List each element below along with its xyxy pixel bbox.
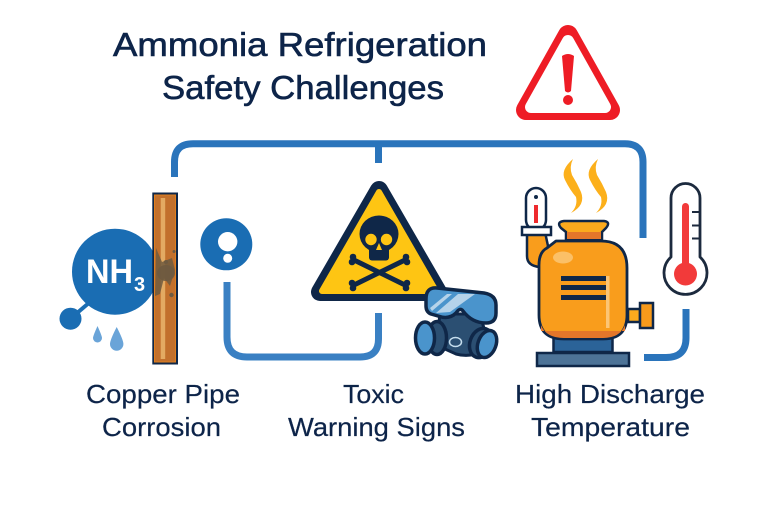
icon: toxic warning triangle <box>320 190 438 292</box>
skull and crossbones <box>349 216 410 291</box>
flames <box>564 159 607 213</box>
gauge <box>526 188 546 230</box>
label: toxic warning signs: Toxic <box>343 379 404 409</box>
label: copper pipe corrosion: Copper Pipe <box>86 379 240 409</box>
icon: red warning triangle <box>526 35 610 110</box>
connector: lower right bracket <box>644 309 686 358</box>
formula text: 3 <box>134 274 145 296</box>
base <box>554 338 612 352</box>
title: Safety Challenges <box>162 69 444 106</box>
icon: NH3 molecule <box>60 229 158 351</box>
icon: blue info bubble <box>200 218 252 270</box>
corrosion patch <box>155 248 176 297</box>
icon: gas mask with goggles <box>416 288 500 361</box>
connector: top bracket <box>174 144 643 238</box>
icon: thermometer <box>664 184 707 294</box>
neck <box>559 221 608 240</box>
body <box>539 241 627 339</box>
icon: compressor <box>522 159 653 366</box>
label: copper pipe corrosion: Corrosion <box>102 412 221 442</box>
title <box>113 26 487 106</box>
label: high discharge temperature: Temperature <box>531 412 690 442</box>
label: high discharge temperature <box>515 379 705 442</box>
icon: corroded copper pipe <box>152 192 178 364</box>
label: copper pipe corrosion <box>86 379 240 442</box>
gauge pipe <box>527 232 548 267</box>
label: high discharge temperature: High Discharge <box>515 379 705 409</box>
label: toxic warning signs <box>288 379 465 442</box>
title: Ammonia Refrigeration <box>113 26 487 63</box>
connector: lower left bracket <box>227 282 378 357</box>
label: toxic warning signs: Warning Signs <box>288 412 465 442</box>
discharge port <box>628 309 640 322</box>
icon: droplets <box>93 326 123 351</box>
formula text: NH <box>86 253 133 291</box>
